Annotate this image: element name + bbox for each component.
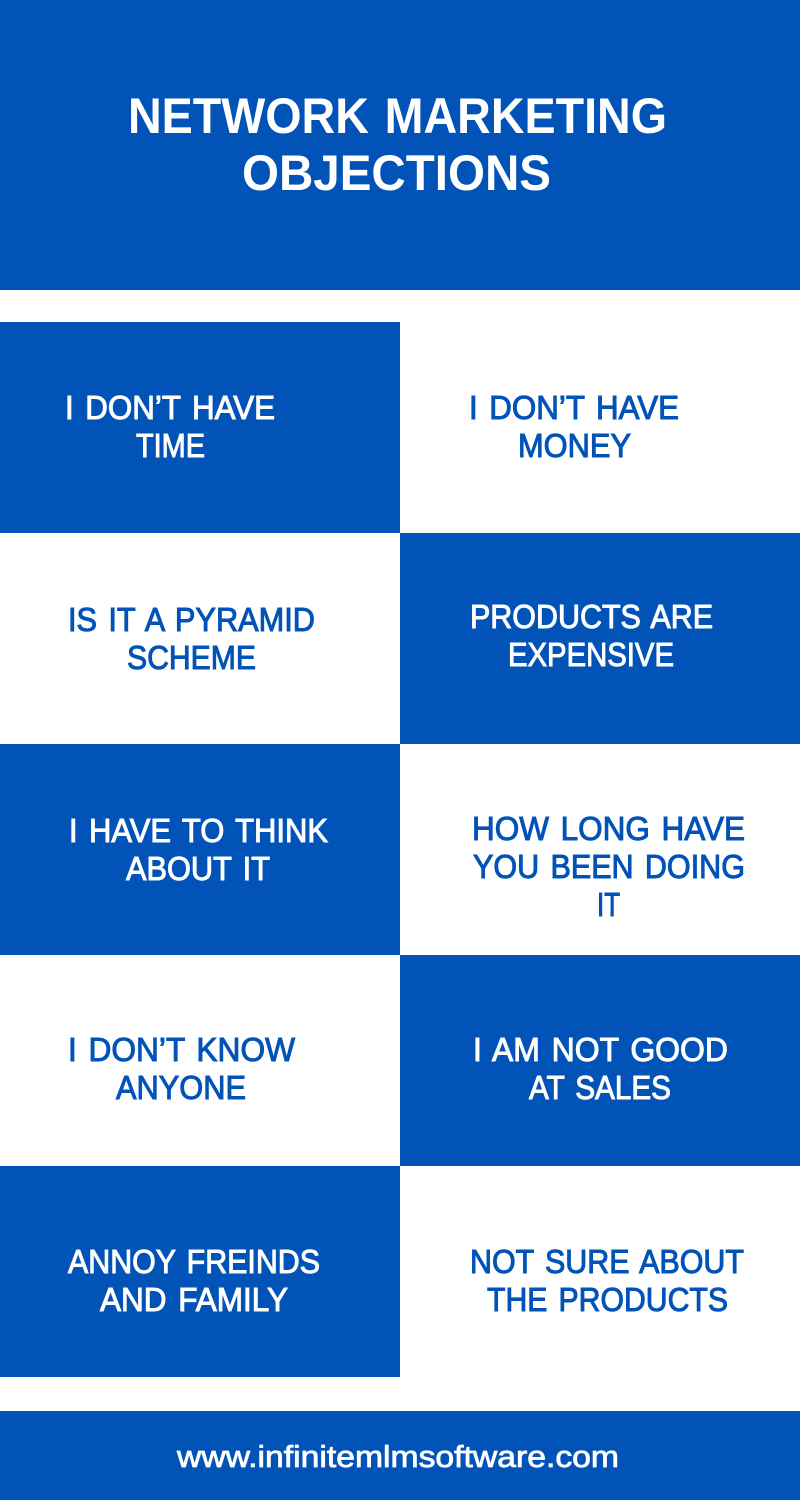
objection text: AND FAMILY (100, 1281, 288, 1318)
objection text (472, 810, 745, 923)
objection text: I AM NOT GOOD (473, 1031, 728, 1068)
objection text: PRODUCTS ARE (470, 598, 713, 635)
panel: I don't know anyone (0, 955, 400, 1166)
title (128, 88, 667, 201)
objection text: I DON’T HAVE (65, 389, 275, 426)
panel: I have to think about it (0, 744, 400, 955)
objection text: EXPENSIVE (508, 636, 674, 673)
panel: I don't have money (400, 322, 800, 533)
website url: www.infinitemlmsoftware.com (176, 1439, 619, 1474)
objection text: ANNOY FREINDS (68, 1243, 320, 1280)
objection text (469, 389, 679, 464)
objection text: MONEY (518, 427, 631, 464)
header panel (0, 0, 800, 290)
objection text (69, 812, 328, 887)
objection text: IT (597, 886, 620, 923)
objection text (65, 389, 275, 464)
objection text (473, 1031, 728, 1106)
objection text: I DON’T HAVE (469, 389, 679, 426)
objection text: I DON’T KNOW (68, 1031, 296, 1068)
objection text (68, 1243, 320, 1318)
objection text (68, 601, 315, 676)
objection text (68, 1031, 296, 1106)
objection text: TIME (136, 427, 205, 464)
objection text: ANYONE (116, 1069, 246, 1106)
objection text: ABOUT IT (126, 850, 270, 887)
objection text: SCHEME (127, 639, 256, 676)
panel: annoy friends and family (0, 1166, 400, 1377)
panel: products are expensive (400, 533, 800, 744)
objection text: IS IT A PYRAMID (68, 601, 315, 638)
objection text (470, 598, 713, 673)
title: NETWORK MARKETING (128, 88, 667, 144)
objection text: THE PRODUCTS (487, 1281, 728, 1318)
objection text (470, 1243, 744, 1318)
panel: not sure about the products (400, 1166, 800, 1377)
panel: I don't have time (0, 322, 400, 533)
panel: I am not good at sales (400, 955, 800, 1166)
title: OBJECTIONS (242, 145, 551, 201)
panel: how long have you been doing it (400, 744, 800, 955)
footer panel (0, 1411, 800, 1500)
objection text: HOW LONG HAVE (472, 810, 745, 847)
objection text: YOU BEEN DOING (473, 848, 745, 885)
panel: is it a pyramid scheme (0, 533, 400, 744)
objection text: NOT SURE ABOUT (470, 1243, 744, 1280)
objection text: AT SALES (529, 1069, 671, 1106)
objection text: I HAVE TO THINK (69, 812, 328, 849)
